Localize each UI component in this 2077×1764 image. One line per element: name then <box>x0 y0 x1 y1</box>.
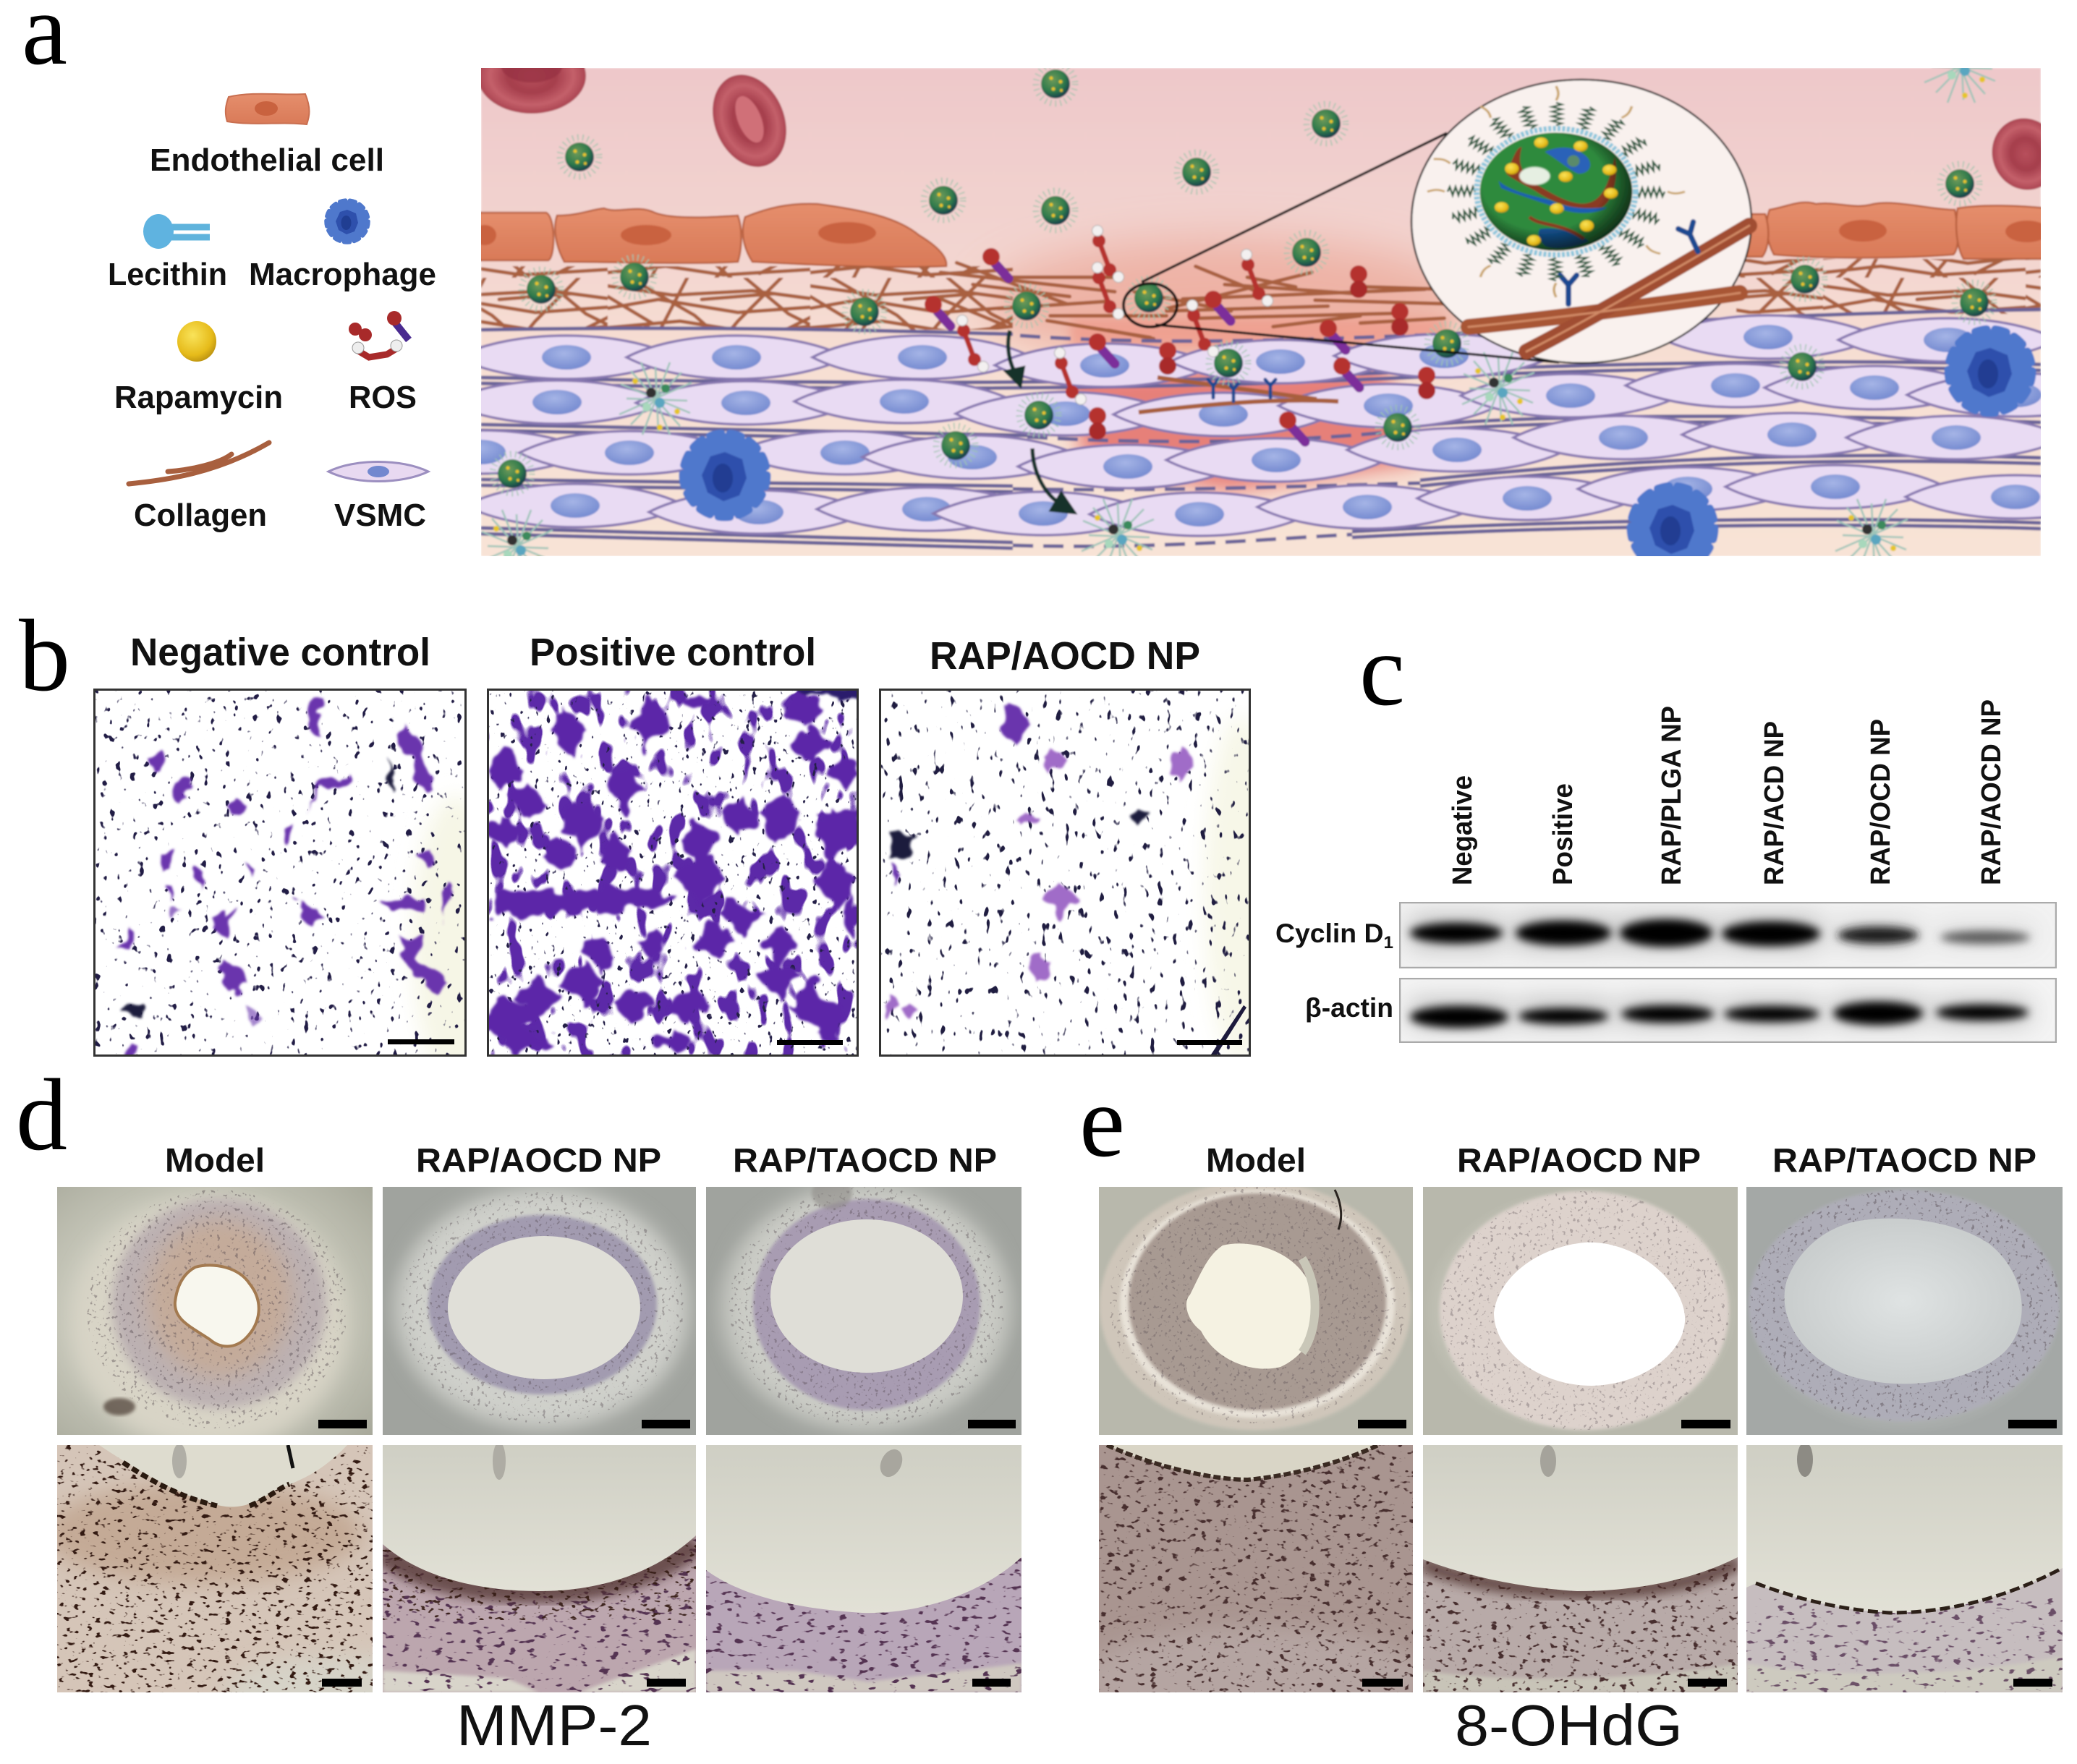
icon: endothelial cell <box>226 94 310 124</box>
icon: collagen <box>129 443 269 484</box>
western blot lane labels: RAP/OCD NP <box>1866 719 1896 885</box>
panel b title: negative control: Negative control <box>130 631 430 674</box>
panel label: b: b <box>19 598 70 712</box>
panel e title: RAP/AOCD NP: RAP/AOCD NP <box>1457 1141 1701 1179</box>
micrograph: positive control <box>487 689 859 1057</box>
panel e title: RAP/TAOCD NP: RAP/TAOCD NP <box>1772 1141 2036 1179</box>
legend label: rapamycin: Rapamycin <box>114 380 283 415</box>
PEG chains <box>1427 86 1685 297</box>
callout: zoom lines and small circle <box>1124 133 1559 362</box>
histology d: RAP/AOCD NP low magnification <box>383 1187 696 1435</box>
icon: macrophage <box>326 200 368 242</box>
legend label: VSMC: VSMC <box>334 498 426 533</box>
icon: ROS molecules <box>349 311 409 357</box>
red blood cells <box>477 38 2069 200</box>
nanoparticle core <box>1477 129 1636 255</box>
legend label: collagen: Collagen <box>134 498 267 533</box>
panel b title: positive control: Positive control <box>530 631 816 674</box>
legend: cell and molecule key <box>108 94 436 533</box>
icon: rapamycin <box>177 321 216 362</box>
heading: MMP-2: MMP-2 <box>456 1693 652 1757</box>
elastic fibre lines <box>481 310 2041 548</box>
panel label: d: d <box>16 1057 67 1172</box>
inflamed red zone <box>1063 318 1447 492</box>
label: Cyclin D1: Cyclin D <box>1275 919 1382 948</box>
macrophages <box>683 329 2032 570</box>
icon: VSMC <box>328 461 428 482</box>
western blot lane labels: Negative <box>1448 775 1478 885</box>
vascular smooth muscle cells <box>371 315 2077 536</box>
western blot lane labels: RAP/PLGA NP <box>1657 706 1687 885</box>
panel d title: RAP/TAOCD NP: RAP/TAOCD NP <box>733 1141 997 1179</box>
histology d: model high magnification <box>57 1445 373 1692</box>
legend label: lecithin: Lecithin <box>108 257 227 292</box>
magnified collagen fibres <box>1469 226 1749 351</box>
label: Cyclin D1: 1 <box>1384 933 1393 953</box>
histology e: RAP/TAOCD NP high magnification <box>1746 1445 2063 1692</box>
histology e: RAP/AOCD NP low magnification <box>1423 1187 1738 1435</box>
legend label: endothelial cell: Endothelial cell <box>150 142 384 178</box>
heading: 8-OHdG: 8-OHdG <box>1455 1693 1683 1757</box>
callout: magnified nanoparticle <box>1411 80 1751 363</box>
label: beta-actin: β-actin <box>1305 993 1393 1023</box>
damaged collagen and receptors <box>1139 378 1338 412</box>
histology e: RAP/TAOCD NP low magnification <box>1746 1187 2063 1435</box>
panel b title: RAP/AOCD NP: RAP/AOCD NP <box>930 634 1200 678</box>
panel d title: RAP/AOCD NP: RAP/AOCD NP <box>416 1141 661 1179</box>
magnified receptors <box>1560 222 1705 304</box>
histology e: model high magnification <box>1099 1445 1413 1692</box>
western blot: beta-actin <box>1399 978 2057 1043</box>
western blot lane labels: RAP/ACD NP <box>1759 721 1790 885</box>
arrows: nanoparticle penetration <box>1007 331 1074 512</box>
panel d title: Model: Model <box>165 1141 265 1179</box>
icon: lecithin <box>143 214 210 249</box>
micrograph: negative control <box>93 689 467 1057</box>
panel a: vessel wall illustration <box>481 68 2041 556</box>
western blot lane labels: Positive <box>1548 783 1579 885</box>
legend label: ROS: ROS <box>349 380 417 415</box>
nanoparticles <box>493 64 1994 493</box>
disassembled nanoparticles <box>480 30 1997 582</box>
histology d: RAP/TAOCD NP low magnification <box>706 1187 1021 1435</box>
histology d: RAP/AOCD NP high magnification <box>383 1445 696 1692</box>
histology e: model low magnification <box>1099 1187 1413 1435</box>
histology e: RAP/AOCD NP high magnification <box>1423 1445 1738 1692</box>
western blot lane labels: RAP/AOCD NP <box>1976 699 2007 885</box>
western blot lane labels <box>1448 699 2007 885</box>
endothelial cells <box>470 203 2047 267</box>
panel label: c: c <box>1359 613 1405 727</box>
histology d: RAP/TAOCD NP high magnification <box>706 1445 1021 1692</box>
micrograph: RAP/AOCD NP <box>879 689 1251 1057</box>
western blot: Cyclin D1 <box>1399 902 2057 968</box>
panel e title: Model: Model <box>1206 1141 1306 1179</box>
panel label: e: e <box>1079 1064 1125 1178</box>
ROS molecules <box>925 226 1435 442</box>
legend label: macrophage: Macrophage <box>249 257 436 292</box>
collagen fibre network <box>481 259 2041 338</box>
histology d: model low magnification <box>57 1187 373 1435</box>
